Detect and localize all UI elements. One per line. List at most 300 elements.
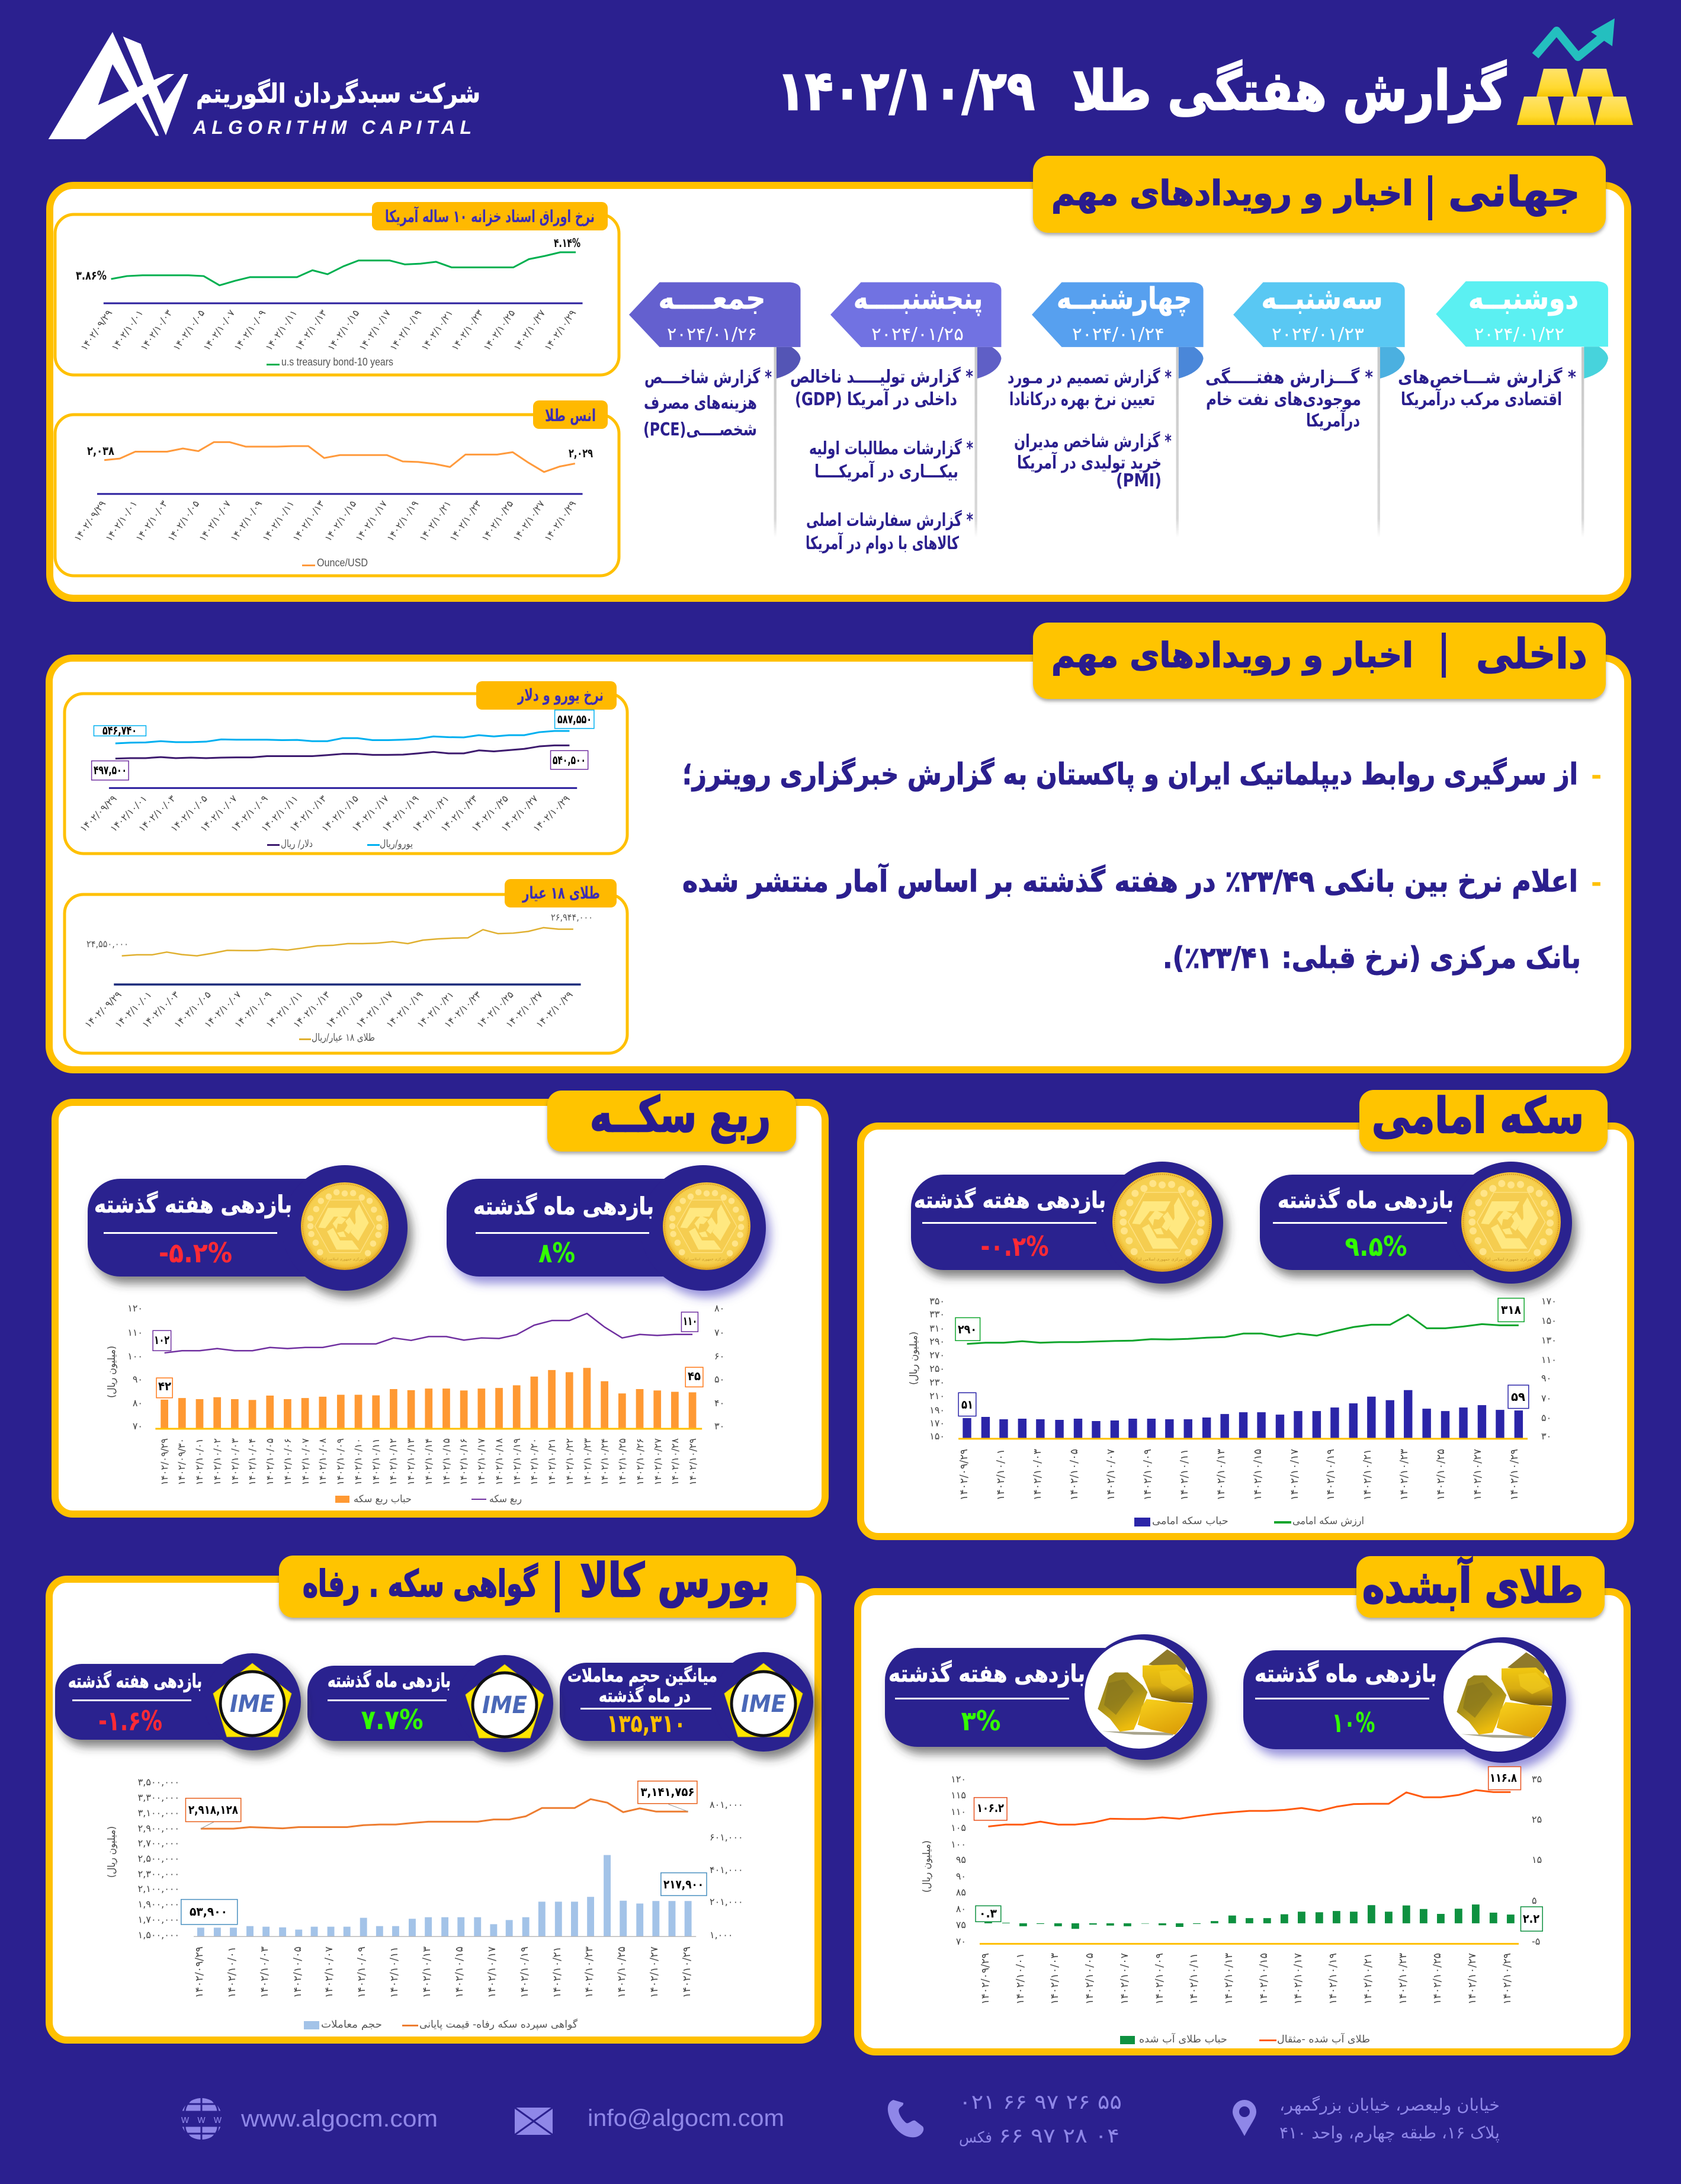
KPI: week return: [911, 1162, 1223, 1284]
date axis: ۱۴۰۲/۱۰/۲۹: [1502, 1953, 1513, 2005]
date axis: ۱۴۰۲/۱۰/۲۱: [1362, 1953, 1374, 2005]
date axis: ۱۴۰۲/۱۰/۰۹: [229, 793, 270, 834]
date axis: ۱۴۰۲/۱۰/۱۱: [370, 1438, 381, 1486]
date axis: ۱۴۰۲/۱۰/۲۵: [616, 1946, 628, 1998]
date axis: ۱۴۰۲/۱۰/۰۱: [109, 307, 145, 352]
KPI: month return: بازدهی ماه گذشته: [1278, 1187, 1454, 1213]
panel: commodity exchange: [49, 1554, 818, 2040]
date axis: ۱۴۰۲/۱۰/۱۹: [384, 989, 425, 1030]
heading: quarter coin: ربع سکــه: [590, 1087, 771, 1143]
text: Tuesday events: [1205, 367, 1373, 431]
date axis: ۱۴۰۲/۱۰/۰۳: [140, 989, 181, 1030]
left axis: ۱۰۰: [127, 1351, 143, 1362]
KPI: week return: -۵.۲%: [159, 1237, 232, 1269]
date axis: ۱۴۰۲/۱۰/۱۵: [319, 793, 361, 834]
date axis: ۱۴۰۲/۱۰/۲۵: [1435, 1449, 1447, 1500]
date axis: ۱۴۰۲/۱۰/۰۱: [1015, 1953, 1026, 2005]
date axis: ۱۴۰۲/۱۰/۰۵: [1084, 1953, 1096, 2005]
legend: طلای آب شده -مثقال: [1277, 2032, 1370, 2045]
right axis: [1541, 1295, 1557, 1442]
date axis: ۱۴۰۲/۱۰/۲۱: [546, 1438, 557, 1486]
date axis: [958, 1449, 1520, 1500]
footer: website: [179, 2098, 438, 2140]
date axis: ۱۴۰۲/۱۰/۱۱: [389, 1946, 400, 1998]
bars and line: [181, 1781, 707, 1936]
value labels: ۵۹: [1511, 1390, 1525, 1404]
legend: یورو/ریال: [380, 838, 413, 850]
text: Friday events: هزینه‌های مصرف: [644, 393, 757, 413]
date axis: ۱۴۰۲/۱۰/۰۳: [229, 1438, 240, 1486]
date axis: ۱۴۰۲/۰۹/۲۹: [958, 1449, 970, 1500]
date axis: ۱۴۰۲/۰۹/۲۹: [82, 989, 124, 1030]
KPI: month return: [447, 1165, 766, 1291]
left axis: ۲,۳۰۰,۰۰۰: [138, 1868, 179, 1880]
icon: location pin: [1233, 2100, 1256, 2136]
text: Thursday events: * گزارشات مطالبات اولیه: [809, 438, 973, 459]
date axis: ۱۴۰۲/۱۰/۲۷: [511, 498, 547, 543]
chart title: نرخ یورو و دلار: [517, 685, 604, 705]
date axis: ۱۴۰۲/۱۰/۲۱: [551, 1946, 563, 1998]
icon: gold bars with rising arrow: [1517, 18, 1633, 125]
date axis: ۱۴۰۲/۱۰/۰۱: [995, 1449, 1007, 1500]
date axis: ۱۴۰۲/۱۰/۰۸: [317, 1438, 328, 1486]
right axis: ۶۰: [714, 1351, 724, 1362]
value labels: ۵۴۰,۵۰۰: [553, 753, 586, 767]
right axis: [710, 1799, 743, 1941]
left axis: [951, 1774, 966, 1947]
date axis: ۱۴۰۲/۱۰/۰۹: [232, 989, 274, 1030]
axis title: (میلیون ریال): [106, 1826, 118, 1878]
KPI: month return: [1260, 1162, 1572, 1284]
legend: طلای ۱۸ عیار/ریال: [312, 1032, 375, 1044]
KPI: average volume: در ماه گذشته: [599, 1685, 691, 1707]
left axis: ۱,۵۰۰,۰۰۰: [138, 1929, 179, 1941]
date axis: ۱۴۰۲/۱۰/۲۱: [415, 989, 456, 1030]
text: domestic news items: [682, 757, 1602, 976]
date axis: [82, 989, 575, 1030]
legend: [304, 2018, 578, 2031]
date axis: ۱۴۰۲/۱۰/۲۵: [617, 1438, 628, 1486]
heading: quarter coin: [547, 1087, 796, 1152]
legend: u.s treasury bond-10 years: [281, 356, 393, 368]
left axis: ۱,۹۰۰,۰۰۰: [138, 1898, 179, 1910]
left axis: ۲۱۰: [929, 1390, 945, 1402]
heading: melted gold: طلای آبشده: [1362, 1557, 1583, 1614]
left axis: ۱۹۰: [929, 1404, 945, 1416]
value labels: ۲۱۷,۹۰۰: [663, 1877, 704, 1891]
left axis: ۱۰۰: [951, 1839, 966, 1850]
ribbon: Friday: جمعــــه: [659, 281, 765, 316]
axis title: (میلیون ریال): [106, 1346, 118, 1398]
value labels: ۱۰۲: [154, 1333, 169, 1347]
legend: ارزش سکه امامی: [1292, 1515, 1364, 1527]
line series: [114, 928, 581, 984]
date axis: ۱۴۰۲/۰۹/۲۹: [194, 1946, 206, 1998]
date axis: ۱۴۰۲/۱۰/۱۳: [290, 498, 327, 543]
ribbon: Wednesday: چهارشنبــه: [1057, 281, 1192, 316]
text: Wednesday events: * گزارش شاخص مدیران: [1014, 431, 1172, 452]
footer: phone: ۶۶ ۹۷ ۲۸ ۰۴: [999, 2124, 1119, 2148]
left axis: ۷۵: [956, 1919, 966, 1930]
footer: address: پلاک ۱۶، طبقه چهارم، واحد ۴۱۰: [1279, 2123, 1500, 2143]
ribbon: Tuesday: [1233, 281, 1405, 379]
date axis: ۱۴۰۲/۱۰/۱۷: [1292, 1953, 1304, 2005]
calendar shadows: [774, 347, 1584, 538]
legend: حجم معاملات: [321, 2019, 382, 2031]
date axis: ۱۴۰۲/۱۰/۱۵: [454, 1946, 466, 1998]
left axis: ۱۰۵: [951, 1822, 966, 1833]
date axis: ۱۴۰۲/۱۰/۱۹: [387, 307, 424, 352]
chart title: [476, 681, 617, 710]
date axis: ۱۴۰۲/۰۹/۲۹: [72, 498, 108, 543]
right axis: ۴۰۱,۰۰۰: [710, 1864, 743, 1875]
value labels: ۴.۱۴%: [554, 236, 580, 250]
ribbon: Monday: ۲۰۲۴/۰۱/۲۲: [1474, 324, 1564, 345]
left axis: ۳,۱۰۰,۰۰۰: [138, 1807, 179, 1819]
value labels: [76, 236, 580, 283]
right axis: ۹۰: [1541, 1372, 1551, 1384]
text: Wednesday events: تعیین نرخ بهره درکانادا: [1009, 389, 1155, 410]
date axis: ۱۴۰۲/۱۰/۰۷: [198, 793, 239, 834]
ribbon: Friday: ۲۰۲۴/۰۱/۲۶: [667, 324, 757, 345]
right axis: -۵: [1532, 1936, 1540, 1947]
date axis: ۱۴۰۲/۱۰/۰۳: [259, 1946, 271, 1998]
date axis: ۱۴۰۲/۱۰/۲۸: [669, 1438, 681, 1486]
date axis: ۱۴۰۲/۱۰/۱۵: [325, 307, 361, 352]
date axis: ۱۴۰۲/۱۰/۰۳: [138, 307, 175, 352]
date axis: [159, 1438, 698, 1486]
value labels: ۵۸۷,۵۵۰: [557, 712, 592, 726]
left axis: ۱,۷۰۰,۰۰۰: [138, 1914, 179, 1925]
right axis: ۱۷۰: [1541, 1295, 1557, 1307]
title: ۱۴۰۲/۱۰/۲۹: [777, 59, 1035, 123]
date axis: ۱۴۰۲/۱۰/۰۵: [165, 498, 201, 543]
date axis: ۱۴۰۲/۱۰/۲۳: [449, 307, 486, 352]
date axis: ۱۴۰۲/۱۰/۰۳: [133, 498, 170, 543]
value labels: ۵۱: [961, 1397, 973, 1412]
left axis: ۲,۹۰۰,۰۰۰: [138, 1823, 179, 1834]
chart: euro and dollar: [65, 681, 627, 854]
bars and line: [153, 1312, 703, 1429]
date axis: ۱۴۰۲/۱۰/۱۳: [421, 1946, 433, 1998]
date axis: ۱۴۰۲/۱۰/۱۱: [260, 498, 296, 543]
date axis: ۱۴۰۲/۱۰/۲۱: [1362, 1449, 1374, 1500]
left axis: ۱۱۵: [951, 1789, 966, 1801]
text: Wednesday events: [1008, 367, 1172, 491]
date axis: ۱۴۰۲/۰۹/۲۹: [78, 793, 119, 834]
text: Friday events: [643, 367, 772, 440]
date axis: ۱۴۰۲/۱۰/۱۳: [291, 989, 332, 1030]
ribbon: Thursday: پنجشنبــــه: [854, 281, 983, 316]
left axis: ۲۵۰: [929, 1363, 945, 1374]
date axis: ۱۴۰۲/۱۰/۱۷: [357, 307, 393, 352]
heading: domestic news: داخلی: [1476, 630, 1587, 678]
legend: [335, 1493, 522, 1505]
footer: email: info@algocm.com: [588, 2105, 784, 2131]
right axis: ۱۱۰: [1541, 1354, 1557, 1365]
text: Wednesday events: (PMI): [1116, 470, 1162, 491]
left axis: ۹۰: [956, 1871, 966, 1882]
KPI: month return: [1243, 1637, 1566, 1763]
date axis: ۱۴۰۲/۱۰/۰۱: [226, 1946, 238, 1998]
value labels: [154, 1314, 701, 1393]
text: Thursday events: * گزارش سفارشات اصلی: [806, 509, 973, 531]
date axis: ۱۴۰۲/۱۰/۱۷: [354, 989, 395, 1030]
chart: US treasury 10 year: [55, 202, 619, 375]
left axis: ۷۰: [133, 1420, 143, 1432]
date axis: ۱۴۰۲/۱۰/۰۲: [211, 1438, 223, 1486]
date axis: ۱۴۰۲/۱۰/۲۵: [474, 989, 516, 1030]
right axis: ۸۰۱,۰۰۰: [710, 1799, 743, 1810]
date axis: ۱۴۰۲/۱۰/۰۵: [292, 1946, 304, 1998]
date axis: ۱۴۰۲/۱۰/۰۵: [264, 1438, 275, 1486]
KPI: week return: بازدهی هفته گذشته: [94, 1191, 292, 1218]
left axis: ۹۰: [133, 1374, 143, 1385]
value labels: ۱۱۶.۸: [1490, 1771, 1517, 1785]
left axis: ۸۰: [956, 1903, 966, 1914]
right axis: ۳۰: [1541, 1431, 1551, 1442]
left axis: ۱۵۰: [929, 1431, 945, 1442]
date axis: ۱۴۰۲/۱۰/۰۷: [300, 1438, 311, 1486]
date axis: ۱۴۰۲/۱۰/۱۷: [476, 1438, 487, 1486]
date axis: ۱۴۰۲/۰۹/۲۹: [980, 1953, 992, 2005]
KPI: week return: [55, 1653, 301, 1750]
date axis: ۱۴۰۲/۱۰/۲۳: [1397, 1953, 1409, 2005]
footer: phone: [888, 2090, 1122, 2148]
date axis: ۱۴۰۲/۱۰/۱۵: [1258, 1953, 1270, 2005]
date axis: [78, 793, 572, 834]
date axis: ۱۴۰۲/۱۰/۰۵: [172, 989, 213, 1030]
right axis: ۳۰: [714, 1420, 724, 1432]
text: Thursday events: * گزارش تولیـــــد ناخالص: [790, 366, 973, 387]
date axis: ۱۴۰۲/۱۰/۰۷: [197, 498, 233, 543]
date axis: ۱۴۰۲/۱۰/۱۸: [493, 1438, 505, 1486]
date axis: ۱۴۰۲/۱۰/۰۹: [228, 498, 264, 543]
date axis: ۱۴۰۲/۱۰/۱۹: [380, 793, 421, 834]
right axis: ۷۰: [1541, 1393, 1551, 1404]
heading: global news: [1033, 156, 1606, 233]
heading: Emami coin: سکه امامی: [1372, 1088, 1584, 1144]
text: Tuesday events: * گـــزارش هفتـــــگی: [1205, 367, 1373, 388]
panel: Emami coin: [861, 1088, 1631, 1537]
line series: [92, 710, 594, 788]
date axis: [72, 498, 578, 543]
value labels: [977, 1771, 1539, 1926]
value labels: ۳.۸۶%: [76, 268, 107, 283]
text: Monday events: * گزارش شـــاخص‌های: [1398, 367, 1576, 388]
bars and line: [955, 1298, 1529, 1439]
KPI: month return: بازدهی ماه گذشته: [473, 1192, 654, 1220]
footer: phone: فکس: [959, 2129, 992, 2147]
date axis: ۱۴۰۲/۱۰/۱۹: [1327, 1953, 1339, 2005]
date axis: ۱۴۰۲/۱۰/۲۹: [534, 989, 575, 1030]
date axis: ۱۴۰۲/۱۰/۰۶: [282, 1438, 293, 1486]
ribbon: Friday: [629, 281, 801, 379]
date axis: ۱۴۰۲/۱۰/۲۷: [499, 793, 540, 834]
date axis: ۱۴۰۲/۱۰/۱۱: [264, 989, 305, 1030]
date axis: [194, 1946, 693, 1998]
left axis: ۳۱۰: [929, 1323, 945, 1334]
date axis: ۱۴۰۲/۱۰/۲۱: [417, 498, 453, 543]
value labels: ۲,۰۳۸: [87, 444, 114, 458]
date axis: ۱۴۰۲/۱۰/۱۵: [441, 1438, 452, 1486]
date axis: ۱۴۰۲/۱۰/۰۳: [136, 793, 178, 834]
date axis: ۱۴۰۲/۱۰/۰۵: [171, 307, 207, 352]
footer: email: [515, 2105, 784, 2135]
date axis: ۱۴۰۲/۰۹/۲۹: [78, 307, 114, 352]
date axis: ۱۴۰۲/۱۰/۲۳: [582, 1438, 593, 1486]
heading: commodity exchange: گواهی سکه . رفاه: [303, 1562, 538, 1605]
KPI: month return: ۷.۷%: [361, 1704, 423, 1736]
chart: 18 karat gold: [65, 879, 627, 1053]
ribbon: Thursday: [830, 281, 1001, 379]
date axis: ۱۴۰۲/۱۰/۱۳: [405, 1438, 416, 1486]
right axis: ۵۰: [714, 1374, 724, 1385]
value labels: ۴۹۷,۵۰۰: [94, 763, 127, 777]
legend: حباب طلای آب شده: [1139, 2032, 1227, 2045]
panel: domestic news: [49, 658, 1628, 1070]
legend: حباب سکه امامی: [1152, 1515, 1228, 1527]
date axis: ۱۴۰۲/۱۰/۱۱: [1179, 1449, 1191, 1500]
heading: commodity exchange: [279, 1554, 796, 1618]
date axis: ۱۴۰۲/۱۰/۲۷: [649, 1946, 660, 1998]
left axis: ۸۰: [133, 1397, 143, 1409]
date axis: ۱۴۰۲/۱۰/۲۳: [447, 498, 484, 543]
date axis: ۱۴۰۲/۱۰/۰۷: [1105, 1449, 1117, 1500]
date axis: ۱۴۰۲/۱۰/۲۵: [481, 307, 517, 352]
legend: ربع سکه: [489, 1493, 522, 1505]
date axis: ۱۴۰۲/۱۰/۰۳: [1032, 1449, 1044, 1500]
date axis: ۱۴۰۲/۱۰/۱۵: [322, 498, 358, 543]
date axis: ۱۴۰۲/۱۰/۰۱: [194, 1438, 205, 1486]
chart: gold ounce: [55, 400, 619, 576]
date axis: ۱۴۰۲/۱۰/۰۵: [168, 793, 210, 834]
date axis: ۱۴۰۲/۰۹/۳۰: [176, 1438, 187, 1486]
panel: melted gold: [858, 1556, 1627, 2052]
value labels: ۴۵: [688, 1369, 701, 1383]
right axis: ۵: [1532, 1895, 1537, 1906]
date axis: ۱۴۰۲/۱۰/۲۹: [542, 498, 578, 543]
date axis: ۱۴۰۲/۱۰/۲۴: [599, 1438, 610, 1486]
chart: melted gold bubble and price: [921, 1767, 1542, 2045]
logo: Algorithm Capital: [49, 32, 480, 139]
axis title: (میلیون ریال): [908, 1332, 920, 1385]
value labels: [958, 1303, 1525, 1412]
value labels: [86, 912, 593, 950]
left axis: ۷۰: [956, 1936, 966, 1947]
legend: [1134, 1515, 1364, 1527]
legend: [1120, 2032, 1370, 2045]
heading: domestic news: اخبار و رویدادهای مهم: [1051, 635, 1413, 676]
KPI: week return: -۱.۶%: [98, 1705, 162, 1737]
left axis: ۱۲۰: [127, 1303, 143, 1314]
chart: certificate volume and price: [106, 1776, 743, 2031]
icon: globe: [179, 2098, 223, 2140]
date axis: ۱۴۰۲/۱۰/۱۹: [1325, 1449, 1337, 1500]
date axis: ۱۴۰۲/۱۰/۰۹: [1142, 1449, 1154, 1500]
value labels: ۰.۳: [979, 1906, 997, 1920]
right axis: ۷۰: [714, 1327, 724, 1338]
date axis: ۱۴۰۲/۱۰/۱۳: [293, 307, 329, 352]
chart: Emami bubble and value: [908, 1295, 1557, 1527]
date axis: ۱۴۰۲/۱۰/۰۷: [1119, 1953, 1131, 2005]
value labels: ۴۲: [158, 1379, 171, 1393]
value labels: ۲,۰۲۹: [569, 446, 593, 460]
value labels: ۲۹۰: [958, 1322, 977, 1336]
date axis: ۱۴۰۲/۱۰/۲۷: [652, 1438, 663, 1486]
date axis: ۱۴۰۲/۱۰/۰۷: [201, 307, 238, 352]
KPI: week return: [88, 1165, 408, 1291]
text: Monday events: [1398, 367, 1576, 410]
date axis: ۱۴۰۲/۱۰/۲۷: [511, 307, 548, 352]
KPI: month return: [307, 1655, 553, 1752]
logo: Algorithm Capital: شرکت سبدگردان الگوریتم: [196, 78, 480, 109]
KPI: week return: -۰.۲%: [981, 1230, 1048, 1262]
date axis: ۱۴۰۲/۱۰/۰۴: [246, 1438, 258, 1486]
value labels: ۵۴۶,۷۴۰: [102, 723, 137, 737]
value labels: ۲۶,۹۴۴,۰۰۰: [551, 912, 593, 923]
legend: Ounce/USD: [317, 557, 368, 569]
text: Wednesday events: * گزارش تصمیم در مـورد: [1008, 367, 1172, 388]
text: Friday events: * گزارش شاخــــص: [644, 367, 772, 388]
line series: [97, 442, 583, 494]
date axis: ۱۴۰۲/۱۰/۱۱: [1188, 1953, 1200, 2005]
right axis: ۱,۰۰۰: [710, 1929, 733, 1941]
ribbon: Wednesday: [1032, 281, 1204, 379]
date axis: ۱۴۰۲/۱۰/۱۷: [353, 498, 390, 543]
date axis: ۱۴۰۲/۱۰/۲۲: [564, 1438, 575, 1486]
value labels: [87, 444, 593, 460]
icon: envelope: [515, 2108, 553, 2135]
chart: quarter coin bubble and price: [106, 1303, 724, 1505]
right axis: ۱۳۰: [1541, 1335, 1557, 1346]
right axis: ۳۵: [1532, 1774, 1542, 1785]
value labels: [188, 1785, 704, 1919]
date axis: ۱۴۰۲/۱۰/۰۹: [232, 307, 268, 352]
date axis: ۱۴۰۲/۱۰/۰۹: [1154, 1953, 1166, 2005]
date axis: ۱۴۰۲/۱۰/۲۱: [410, 793, 451, 834]
chart title: طلای ۱۸ عیار: [522, 883, 600, 903]
right axis: ۱۵: [1532, 1854, 1542, 1865]
text: Wednesday events: خرید تولیدی در آمریکا: [1017, 451, 1162, 473]
axis title: (میلیون ریال): [921, 1840, 933, 1893]
date axis: ۱۴۰۲/۱۰/۲۷: [503, 989, 545, 1030]
icon: phone: [888, 2100, 923, 2137]
heading: domestic news: [1033, 623, 1606, 699]
line series: [104, 252, 583, 303]
value labels: ۳۱۸: [1501, 1303, 1521, 1317]
title: [777, 59, 1506, 123]
heading: global news: اخبار و رویدادهای مهم: [1051, 173, 1413, 214]
KPI: average volume: [560, 1652, 813, 1752]
date axis: ۱۴۰۲/۱۰/۲۶: [634, 1438, 646, 1486]
date axis: ۱۴۰۲/۱۰/۲۱: [419, 307, 455, 352]
value labels: ۲۴,۵۵۰,۰۰۰: [86, 938, 129, 950]
text: Thursday events: داخلی در آمریکا (GDP): [795, 388, 957, 410]
date axis: ۱۴۰۲/۱۰/۰۹: [356, 1946, 368, 1998]
right axis: ۲۵: [1532, 1814, 1542, 1825]
date axis: ۱۴۰۲/۱۰/۱۵: [1252, 1449, 1264, 1500]
date axis: ۱۴۰۲/۱۰/۲۵: [479, 498, 515, 543]
KPI: week return: بازدهی هفته گذشته: [68, 1670, 202, 1692]
left axis: ۸۵: [956, 1887, 966, 1898]
right axis: [714, 1303, 724, 1432]
date axis: ۱۴۰۲/۱۰/۲۳: [442, 989, 483, 1030]
legend: گواهی سپرده سکه رفاه- قیمت پایانی: [419, 2018, 578, 2031]
date axis: ۱۴۰۲/۱۰/۱۷: [1289, 1449, 1301, 1500]
date axis: ۱۴۰۲/۱۰/۱۲: [387, 1438, 399, 1486]
KPI: month return: ۹.۵%: [1345, 1230, 1407, 1262]
